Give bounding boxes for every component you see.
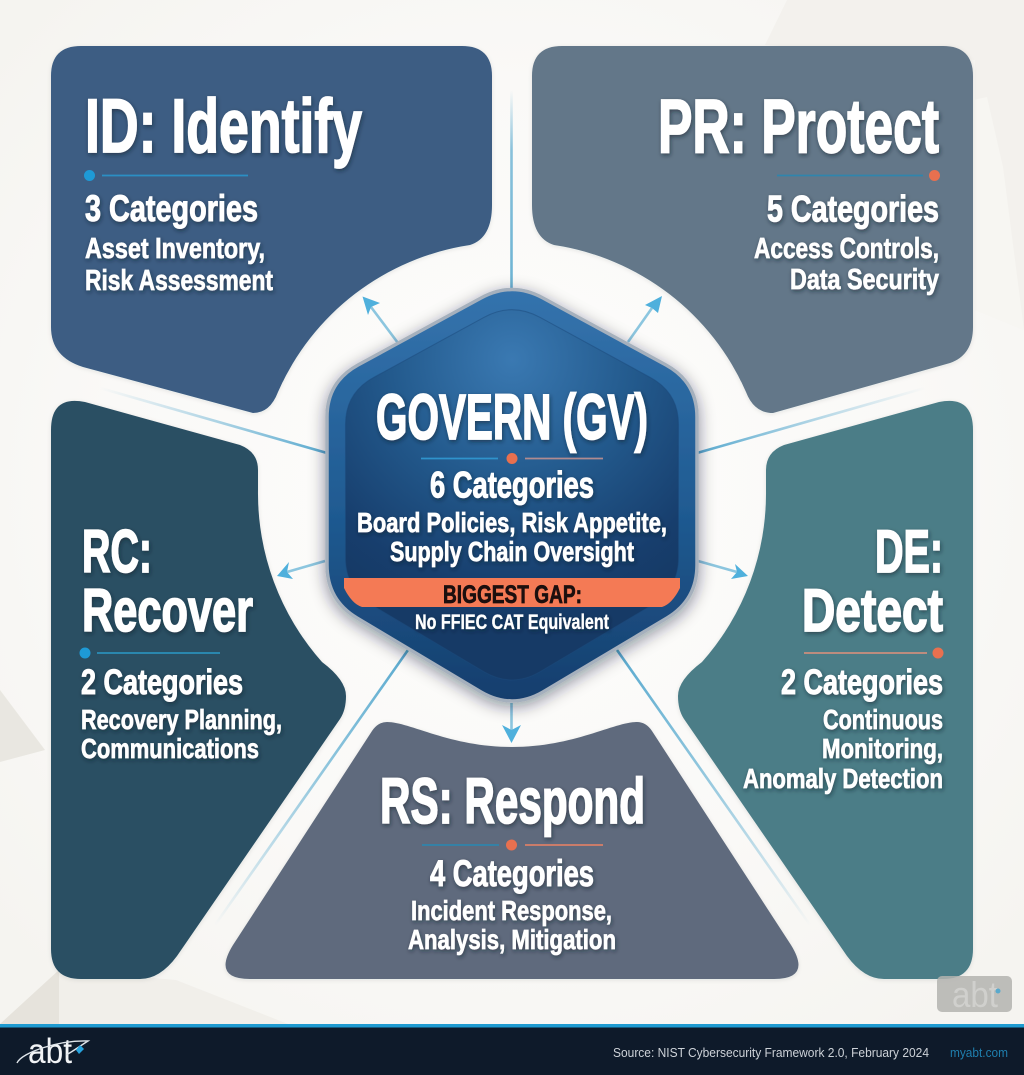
category count: 2 Categories (81, 663, 243, 702)
arrow: to Respond (502, 703, 521, 743)
category count: 2 Categories (781, 663, 943, 702)
description: Recovery Planning, (81, 704, 282, 735)
divider rule and dot (777, 170, 940, 181)
heading: DE Detect (802, 518, 943, 644)
description: Continuous (823, 704, 943, 735)
arrow: to Identify (362, 296, 398, 343)
callout detail: No FFIEC CAT Equivalent (415, 611, 609, 634)
divider rules and dot (422, 840, 603, 850)
arrow: to Detect (698, 561, 748, 579)
arrow: to Protect (628, 296, 662, 342)
watermark logo: abt (952, 974, 998, 1015)
watermark logo (937, 974, 1012, 1015)
panel: DE Detect (678, 401, 973, 979)
hexagon inner face (346, 310, 678, 680)
description: Analysis, Mitigation (408, 924, 616, 955)
hexagon outer ring (327, 290, 697, 701)
description: Anomaly Detection (743, 763, 943, 794)
heading: DE Detect: Detect (802, 577, 943, 644)
description: Supply Chain Oversight (390, 536, 634, 567)
description (85, 233, 273, 297)
divider dot and rule (80, 648, 220, 658)
description: Communications (81, 733, 259, 764)
heading: RC Recover (82, 518, 253, 644)
callout: biggest gap band: BIGGEST GAP: (443, 581, 582, 609)
connector lines (100, 90, 925, 925)
source credit: Source: NIST Cybersecurity Framework 2.0, February 2024 (613, 1046, 929, 1060)
panel: ID Identify (51, 46, 492, 413)
heading: DE Detect: DE: (875, 518, 943, 585)
category count: 5 Categories (767, 188, 939, 230)
description: Monitoring, (822, 733, 943, 764)
description (81, 704, 282, 764)
divider rule and dot (804, 648, 944, 658)
description (754, 233, 939, 296)
website link: myabt.com (950, 1046, 1008, 1060)
category count: 4 Categories (430, 853, 594, 894)
description: Incident Response, (411, 895, 612, 926)
heading: ID Identify: ID: Identify (85, 84, 362, 169)
description: Access Controls, (754, 233, 939, 265)
heading: RC Recover: Recover (82, 577, 253, 644)
panel: RC Recover (51, 401, 346, 979)
description: Asset Inventory, (85, 233, 265, 265)
category count: 6 Categories (430, 464, 594, 506)
panel: RS Respond (226, 722, 798, 979)
heading: RS Respond: RS: Respond (380, 765, 645, 837)
description (357, 507, 667, 567)
footer logo: abt (28, 1032, 72, 1071)
footer bar (0, 1024, 1024, 1075)
description: Data Security (790, 264, 939, 296)
heading: RC Recover: RC: (82, 518, 152, 585)
panel: GOVERN hexagon (327, 290, 697, 701)
divider rules and dot (421, 453, 603, 464)
description (743, 704, 943, 794)
footer logo (17, 1032, 88, 1071)
description (408, 895, 616, 955)
callout: biggest gap band (344, 578, 680, 609)
panel: PR Protect (532, 46, 973, 413)
arrow: to Recover (277, 561, 325, 579)
category count: 3 Categories (85, 188, 258, 229)
description: Board Policies, Risk Appetite, (357, 507, 667, 538)
divider dot and rule (84, 170, 248, 181)
heading: GOVERN: GOVERN (GV) (376, 381, 648, 453)
description: Risk Assessment (85, 265, 273, 297)
